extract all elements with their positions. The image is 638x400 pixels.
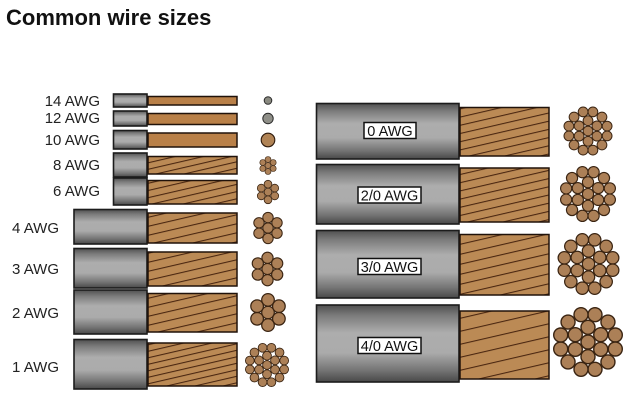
wire: 3/0 AWG: 3/0 AWG [361,260,418,276]
wire: 4/0 AWG: 4/0 AWG [361,339,418,355]
wire: 14 AWG [45,93,272,110]
wire: 12 AWG [45,110,273,127]
wire: 10 AWG: 10 AWG [45,132,100,149]
wire: 12 AWG: 12 AWG [45,110,100,127]
wire: 2 AWG: 2 AWG [12,305,59,322]
wire: 10 AWG [45,130,275,149]
wire: 0 AWG: 0 AWG [367,124,413,140]
wire: 6 AWG [53,178,279,205]
wire: 3 AWG [12,248,283,288]
wire: 0 AWG [316,104,612,159]
wire: 2 AWG [12,290,285,334]
wire: 8 AWG [53,153,276,177]
wire: 3/0 AWG [316,230,619,298]
wire: 2/0 AWG [316,164,615,224]
wire: 2/0 AWG: 2/0 AWG [361,188,418,204]
wire: 6 AWG: 6 AWG [53,183,100,200]
wire: 8 AWG: 8 AWG [53,157,100,174]
wire: 4 AWG: 4 AWG [12,220,59,237]
wire: 1 AWG: 1 AWG [12,359,59,376]
wire: 14 AWG: 14 AWG [45,93,100,110]
wire: 4 AWG [12,210,282,244]
title: Common wire sizes [6,5,211,30]
wire: 4/0 AWG [316,305,622,382]
wire: 1 AWG [12,340,289,389]
wire: 3 AWG: 3 AWG [12,261,59,278]
